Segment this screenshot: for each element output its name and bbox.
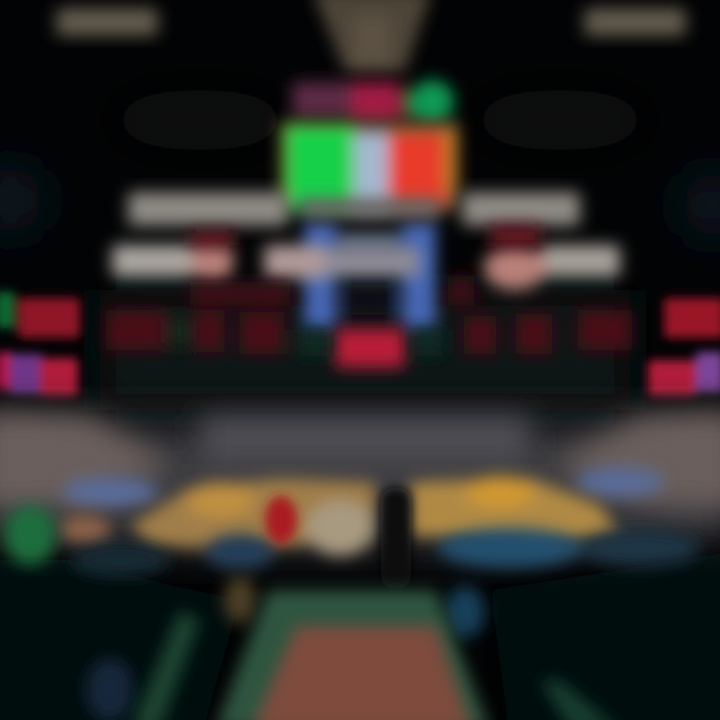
top right sign [584, 8, 686, 36]
crowd stands [0, 410, 720, 545]
left red banner row [0, 292, 80, 338]
right lower banner [648, 352, 720, 396]
right crowd [490, 550, 720, 720]
right red banner [664, 298, 720, 338]
dim red panel row [106, 310, 632, 356]
scoreboard [280, 80, 458, 368]
upper arena darkness [0, 90, 720, 410]
right stand [550, 410, 720, 510]
left crowd [0, 560, 240, 720]
left stand [0, 410, 175, 510]
green spectator [4, 505, 56, 565]
blue stand edges [62, 467, 664, 507]
standing silhouette [381, 488, 411, 588]
ceiling truss [312, 0, 432, 72]
left lower banner [0, 352, 78, 396]
red accents around headline [190, 226, 540, 306]
headline row 2 [112, 242, 620, 290]
headline row 1 [128, 192, 580, 226]
top left sign [56, 8, 158, 36]
lower bowl haze [0, 425, 720, 545]
blue spectators [70, 528, 700, 720]
brown floor [252, 626, 472, 720]
tan spectator [224, 576, 256, 624]
court floor [130, 590, 620, 720]
green floor border [215, 590, 490, 720]
side green lines [130, 610, 620, 720]
lower crowd [0, 488, 720, 720]
red spectator [265, 496, 297, 544]
scoreboard lower columns [304, 222, 436, 330]
center stand [200, 415, 530, 465]
scoreboard top row [292, 80, 454, 124]
scoreboard main screens [280, 122, 458, 212]
scoreboard base [334, 328, 406, 368]
court lights [59, 476, 620, 556]
